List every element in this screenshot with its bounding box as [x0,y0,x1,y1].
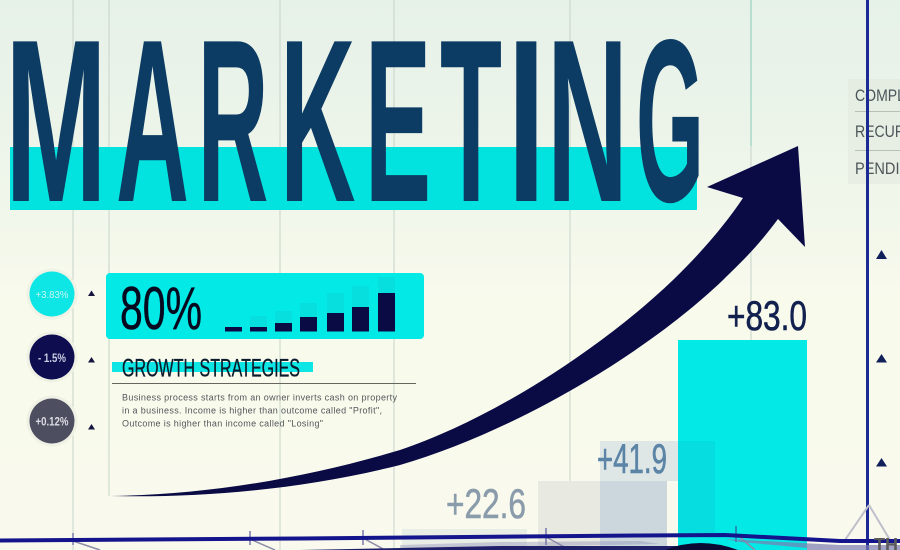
circle: +0.12%: +0.12% [36,416,68,428]
heading: growth strategies: GROWTH STRATEGIES [122,354,300,382]
ghost bars [250,277,395,327]
growth arrow [110,146,805,496]
body text: Outcome is higher than income called "Losing" [122,418,323,428]
blue vertical line [866,0,869,550]
body text: Business process starts from an owner inverts cash on property [122,392,398,402]
circle: +3.83%: +3.83% [36,290,69,301]
right legend panel [848,79,900,184]
value: +22.6: +22.6 [446,480,526,527]
bar: +83.0 [678,340,807,550]
circle: -1.5% [26,332,78,382]
right triangles [876,250,887,466]
faded bars [402,441,715,550]
circle: -1.5%: - 1.5% [38,353,66,365]
small triangles [88,290,95,430]
mini bar chart [225,293,395,332]
heading highlight [112,362,313,372]
value: +41.9: +41.9 [597,435,667,482]
value: +83.0: +83.0 [727,292,807,339]
body text [122,392,398,428]
panel: 80% growth [106,273,424,342]
circle: +3.83% [26,268,78,320]
title band [10,147,697,210]
stat circles [26,268,78,446]
title [5,0,704,251]
bottom chart line [0,505,900,550]
body text: in a business. Income is higher than outcome called "Profit", [122,406,382,416]
circle: +0.12% [26,396,78,446]
stat: 80%: 80% [120,275,202,342]
